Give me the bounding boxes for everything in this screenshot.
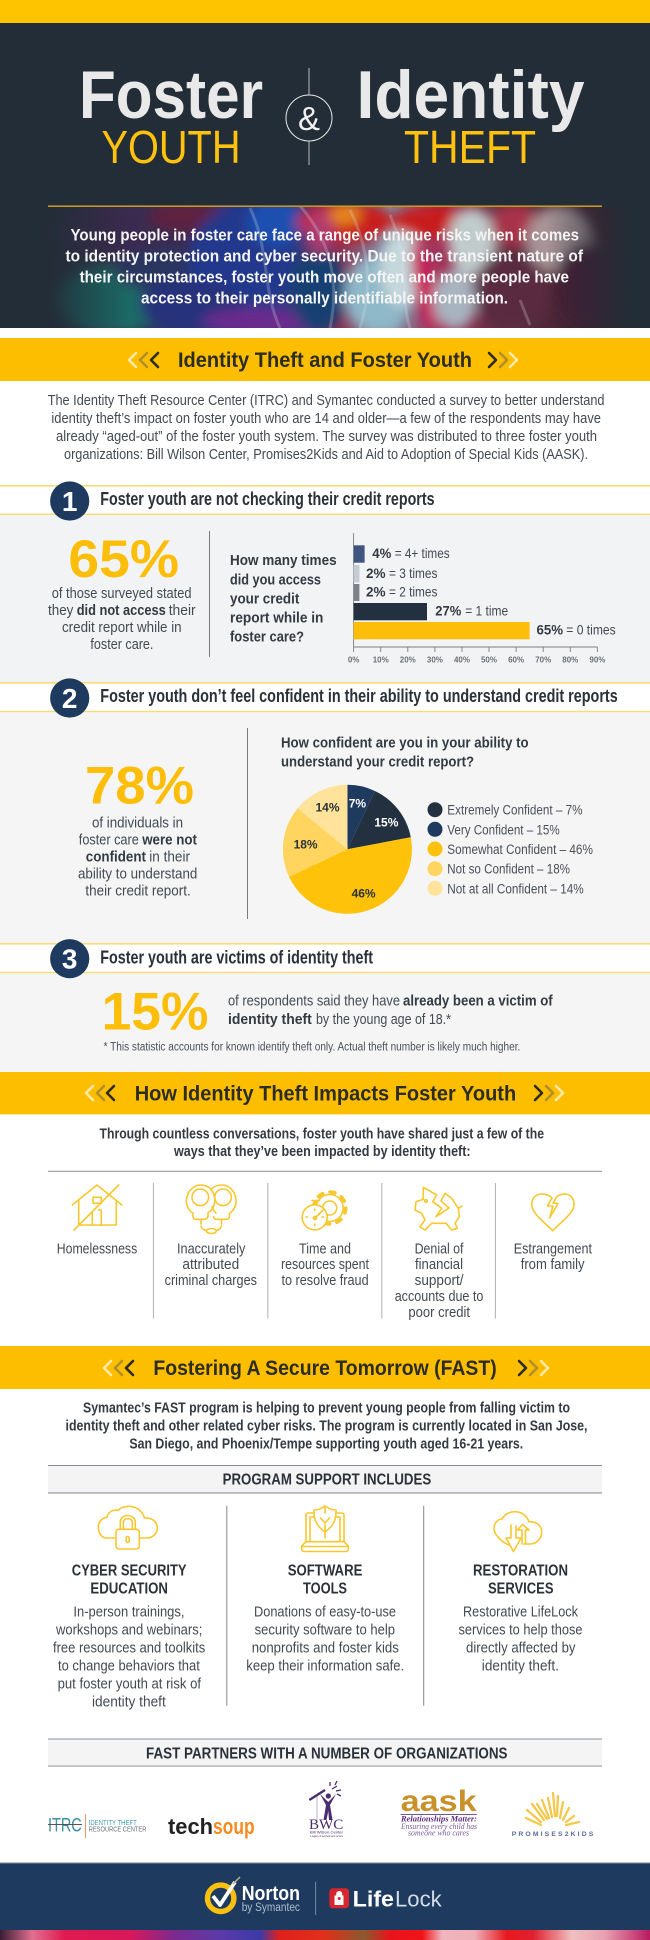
bar chart: 50%	[481, 656, 497, 664]
title: Identity Theft: THEFT	[404, 121, 536, 173]
pie legend: Very Confident – 15%	[447, 822, 560, 837]
logo: Bill Wilson Center	[309, 1781, 344, 1838]
column text	[53, 1604, 205, 1711]
title: Identity Theft	[356, 57, 585, 173]
stat 78%: 78%	[85, 756, 194, 815]
stat 65% caption: did not access	[77, 602, 166, 619]
impact: criminal charges: criminal charges	[165, 1272, 257, 1289]
stat 78% caption: were not	[141, 832, 197, 849]
logo: LifeLock: Lock	[395, 1887, 443, 1912]
bar chart: 20%	[400, 656, 416, 664]
bar chart	[348, 533, 616, 664]
section banner: Identity Theft and Foster Youth: Identity Theft and Foster Youth	[178, 349, 472, 372]
section banner: Fostering A Secure Tomorrow	[0, 1346, 650, 1389]
icon: handcuffs	[186, 1185, 236, 1234]
band: FAST partners	[48, 1738, 602, 1767]
icon: cloud lock	[98, 1506, 157, 1549]
column heading: EDUCATION	[90, 1581, 168, 1598]
column text: free resources and toolkits	[53, 1640, 205, 1657]
top yellow bar	[0, 0, 650, 23]
title: Foster Youth: Foster	[79, 57, 263, 133]
number badge 3	[50, 939, 89, 978]
impact: homelessness	[57, 1185, 137, 1257]
bar chart: = 3 times	[389, 565, 437, 581]
bar chart: 2%	[366, 565, 386, 581]
band: program support includes: PROGRAM SUPPORT INCLUDES	[223, 1471, 431, 1488]
panel: finding 1	[0, 481, 650, 683]
intro paragraph: access to their personally identifiable information.	[141, 290, 508, 308]
program columns	[53, 1506, 582, 1711]
impact: denial of financial support: support/	[415, 1272, 464, 1289]
number badge 3: 3	[62, 944, 77, 975]
column: restoration services: directly affected by	[466, 1640, 576, 1657]
column text: In-person trainings,	[73, 1604, 184, 1621]
bar chart: 27%	[435, 603, 462, 619]
column: software tools: security software to help	[255, 1622, 395, 1639]
logo: ITRC: ITRC	[48, 1816, 82, 1836]
chart question	[230, 552, 337, 645]
title: Foster Youth: YOUTH	[102, 121, 240, 173]
section banner: Fostering A Secure Tomorrow: Fostering A Secure Tomorrow (FAST)	[153, 1357, 497, 1380]
chart question: did you access	[230, 571, 321, 588]
logo: Bill Wilson Center: BWC	[309, 1817, 343, 1833]
impact: estrangement: from family	[521, 1256, 585, 1273]
number badge 2: 2	[62, 683, 77, 714]
pie legend: Not so Confident – 18%	[447, 862, 570, 877]
stat 78% caption: in their	[149, 849, 190, 866]
pie question	[281, 734, 529, 771]
impact: criminal charges: attributed	[182, 1256, 239, 1273]
bar chart: 4%	[372, 545, 392, 561]
impact: denial of financial support: Denial of	[415, 1240, 464, 1257]
bar chart: = 0 times	[566, 622, 616, 638]
stat 78% caption: foster care	[79, 832, 139, 849]
logo: aask: someone who cares	[408, 1828, 469, 1837]
column: cyber security education	[53, 1506, 205, 1711]
column heading: CYBER SECURITY	[72, 1562, 187, 1579]
bar chart: 0%	[348, 656, 359, 664]
pie legend: Extremely Confident – 7%	[447, 803, 582, 818]
section banner: How Identity Theft Impacts Foster Youth: How Identity Theft Impacts Foster Youth	[135, 1083, 516, 1106]
pie chart: 7%	[349, 796, 366, 810]
logo: ITRC: IDENTITY THEFT	[89, 1820, 137, 1827]
logo: aask: aask	[401, 1785, 477, 1818]
bar chart: 60%	[508, 656, 524, 664]
stat 65% caption: of those surveyed stated	[52, 585, 191, 602]
stat 78% caption: of individuals in	[92, 815, 183, 832]
impact: time and resources	[281, 1192, 370, 1289]
logo: Bill Wilson Center: a legacy of self-help and service	[310, 1834, 343, 1838]
ampersand divider: &	[298, 100, 320, 137]
bottom paint strip	[0, 1930, 650, 1940]
logo: aask	[400, 1785, 477, 1837]
number badge 1	[50, 481, 89, 521]
impact: denial of financial support: poor credit	[408, 1304, 471, 1321]
logo: LifeLock: Life	[353, 1887, 394, 1912]
stat 78% caption: confident	[86, 849, 146, 866]
icon: broken piggy bank	[415, 1187, 462, 1230]
column text: put foster youth at risk of	[58, 1676, 202, 1693]
impact: denial of financial support: financial	[415, 1256, 463, 1273]
column: software tools: SOFTWARE	[288, 1562, 362, 1579]
column: software tools: nonprofits and foster kids	[252, 1640, 399, 1657]
impact: denial of financial support: accounts due to	[395, 1288, 483, 1305]
ampersand divider	[286, 68, 332, 165]
stat 15%: 15%	[102, 982, 208, 1041]
logo: Norton: by Symantec	[242, 1902, 300, 1914]
band: FAST partners: FAST PARTNERS WITH A NUMBER OF ORGANIZATIONS	[146, 1745, 508, 1762]
title: Identity Theft: Identity	[356, 57, 585, 133]
logo: Bill Wilson Center: Bill Wilson Center	[310, 1830, 344, 1834]
column text: identity theft	[92, 1694, 167, 1711]
column: software tools	[246, 1506, 404, 1675]
impacts intro text: Through countless conversations, foster youth have shared just a few of the	[100, 1125, 544, 1142]
chart question: foster care?	[230, 628, 304, 645]
bar chart: = 4+ times	[395, 545, 450, 561]
stat 65% caption	[48, 585, 196, 653]
footer logo bar	[0, 1862, 650, 1930]
impact: time and resources: to resolve fraud	[282, 1272, 369, 1289]
FAST intro text	[66, 1400, 588, 1453]
FAST intro text: San Diego, and Phoenix/Tempe supporting youth aged 16-21 years.	[129, 1436, 523, 1453]
footnote: * This statistic accounts for known identify theft only. Actual theft number is likely much higher.	[104, 1042, 520, 1054]
logo: LifeLock	[329, 1887, 443, 1912]
logo: aask: Relationships Matter:	[400, 1814, 477, 1824]
pie chart: 18%	[294, 838, 318, 852]
column: restoration services: services to help those	[458, 1622, 582, 1639]
pie chart: 46%	[352, 886, 376, 900]
band: program support includes	[48, 1465, 602, 1494]
column: restoration services	[458, 1512, 582, 1675]
impact: criminal charges	[165, 1185, 257, 1289]
pie question: How confident are you in your ability to	[281, 734, 529, 751]
header paint artwork	[58, 207, 612, 328]
stat 65% caption: credit report while in	[62, 619, 182, 636]
pie chart: 14%	[315, 800, 340, 814]
icon: stopwatch and gear	[302, 1192, 346, 1230]
column heading	[72, 1562, 187, 1598]
title: Foster Youth	[79, 57, 263, 173]
bar chart: = 2 times	[389, 584, 437, 600]
column: software tools: keep their information safe.	[246, 1658, 404, 1675]
column: restoration services: Restorative LifeLock	[463, 1604, 578, 1621]
bar chart: 10%	[373, 656, 389, 664]
column: software tools: TOOLS	[303, 1581, 347, 1598]
logo: Norton	[208, 1877, 300, 1914]
chart question: your credit	[230, 590, 299, 607]
section banner: Identity Theft and Foster Youth	[0, 338, 650, 381]
icon: laptop with shield	[302, 1506, 348, 1552]
panel: finding 2	[0, 678, 650, 943]
impact: denial of financial support	[395, 1187, 483, 1321]
icon: crossed-out house	[72, 1185, 122, 1230]
stat 65% caption: foster care.	[90, 636, 153, 653]
column: software tools: Donations of easy-to-use	[254, 1604, 396, 1621]
column: restoration services: identity theft.	[482, 1658, 559, 1675]
pie legend	[428, 802, 593, 896]
logo: Norton: Norton	[242, 1883, 300, 1905]
intro paragraph: their circumstances, foster youth move often and more people have	[80, 269, 569, 287]
bar chart: = 1 time	[465, 603, 508, 619]
impact: time and resources: Time and	[299, 1240, 351, 1257]
panel: finding 3	[0, 939, 650, 1072]
stat 78% caption: their credit report.	[85, 883, 191, 900]
impacts intro text	[100, 1125, 544, 1160]
column text: to change behaviors that	[58, 1658, 201, 1675]
icon: broken heart	[532, 1194, 574, 1231]
bar chart: 65%	[536, 622, 564, 638]
survey intro text	[48, 392, 604, 463]
stat 65% caption: their	[169, 602, 196, 619]
logo: aask: Ensuring every child has	[400, 1822, 477, 1831]
logo: ITRC: RESOURCE CENTER	[89, 1826, 146, 1834]
stat 65% caption: they	[48, 602, 74, 619]
stat 78% caption	[78, 815, 197, 900]
stat 15% text: by the young age of 18.*	[316, 1011, 451, 1028]
impacts row	[57, 1183, 593, 1321]
intro paragraph	[66, 226, 583, 308]
bar chart: 2%	[366, 584, 386, 600]
stat 15% text: of respondents said they have	[228, 993, 400, 1010]
column text: workshops and webinars;	[55, 1622, 202, 1639]
bar chart: 40%	[454, 656, 470, 664]
impact: estrangement: Estrangement	[514, 1240, 593, 1257]
stat 15% text: already been a victim of	[403, 993, 554, 1010]
logo: techsoup: soup	[213, 1814, 255, 1839]
number badge 2	[50, 678, 89, 718]
logo: ITRC	[48, 1814, 146, 1838]
stat 65%: 65%	[68, 530, 179, 589]
chart question: How many times	[230, 552, 337, 569]
stat 78% caption: ability to understand	[78, 866, 197, 883]
column: restoration services: SERVICES	[488, 1581, 554, 1598]
column: restoration services: RESTORATION	[473, 1562, 568, 1579]
impact: time and resources: resources spent	[281, 1256, 370, 1273]
impact: estrangement	[514, 1194, 593, 1273]
bar chart: 90%	[589, 656, 605, 664]
bar chart: 70%	[535, 656, 551, 664]
logo: Promises2Kids: PROMISES2KIDS	[512, 1831, 594, 1838]
icon: cloud with arrows	[494, 1512, 542, 1552]
pie chart	[283, 785, 412, 914]
stat 15% text	[228, 993, 554, 1028]
impacts intro text: ways that they’ve been impacted by identity theft:	[173, 1143, 471, 1160]
logo: techsoup	[168, 1814, 255, 1839]
pie question: understand your credit report?	[281, 754, 474, 771]
bar chart: 30%	[427, 656, 443, 664]
stat 15% text: identity theft	[228, 1011, 312, 1028]
heading 3: Foster youth are victims of identity theft	[100, 947, 373, 967]
logo: Promises2Kids	[512, 1793, 594, 1838]
pie legend: Somewhat Confident – 46%	[447, 842, 593, 857]
intro paragraph: Young people in foster care face a range of unique risks when it comes	[70, 226, 579, 244]
impact: homelessness: Homelessness	[57, 1240, 137, 1257]
partner logos	[48, 1781, 594, 1839]
impact: criminal charges: Inaccurately	[177, 1240, 246, 1257]
section banner: How Identity Theft Impacts Foster Youth	[0, 1072, 650, 1114]
pie legend: Not at all Confident – 14%	[447, 881, 584, 896]
heading 1: Foster youth are not checking their credit reports	[100, 489, 435, 509]
chart question: report while in	[230, 609, 323, 626]
pie chart: 15%	[374, 816, 399, 830]
intro paragraph: to identity protection and cyber security. Due to the transient nature of	[66, 248, 583, 266]
header panel	[0, 23, 650, 336]
logo: techsoup: tech	[168, 1814, 213, 1839]
number badge 1: 1	[62, 486, 77, 517]
bar chart: 80%	[562, 656, 578, 664]
